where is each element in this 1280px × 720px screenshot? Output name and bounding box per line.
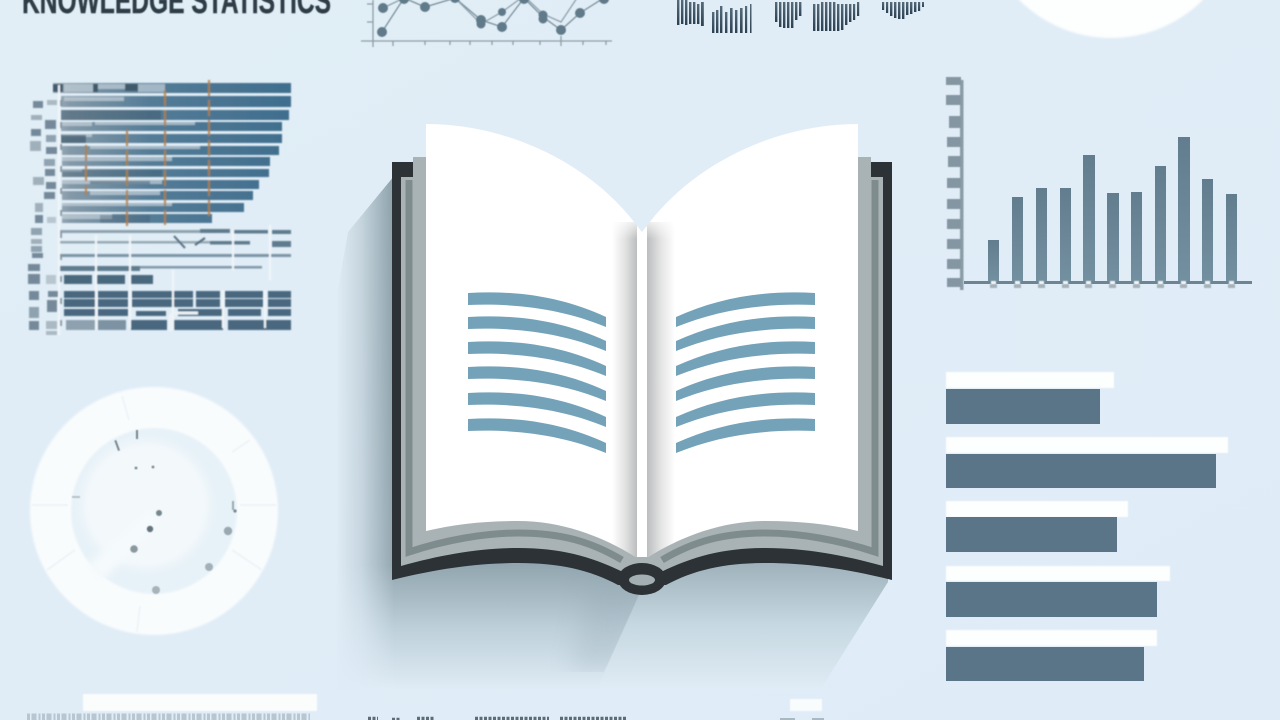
bottom left white label strip bbox=[83, 694, 317, 711]
bottom right white marker bbox=[790, 699, 822, 711]
long shadow of book bbox=[336, 176, 888, 690]
right page text lines bbox=[676, 292, 815, 453]
line chart bbox=[361, 0, 612, 47]
orange gridlines bbox=[86, 80, 209, 232]
right cover and page block bbox=[642, 157, 892, 585]
inner pale disk bbox=[82, 441, 210, 569]
left part of shadow bbox=[336, 176, 650, 690]
open book bbox=[392, 120, 892, 595]
lighter tints and patches on rows bbox=[62, 84, 200, 219]
bottom left faint caption marks bbox=[27, 714, 310, 720]
y axis with ticks bbox=[946, 77, 964, 290]
bars bbox=[988, 137, 1237, 282]
left page text lines bbox=[468, 292, 606, 453]
darker band beside the diagonal bbox=[576, 603, 631, 672]
radial donut chart bbox=[30, 387, 278, 635]
spine loop bbox=[618, 563, 666, 595]
lower segmented rows bbox=[64, 291, 291, 330]
upper bar rows bbox=[53, 83, 291, 223]
x axis ticks bbox=[990, 281, 1235, 288]
vertical bar chart bbox=[946, 77, 1252, 290]
lower thin rows bbox=[60, 229, 291, 284]
white strips bbox=[946, 372, 1228, 646]
bottom centre dark caption marks bbox=[368, 718, 626, 720]
row label blocks bbox=[28, 100, 58, 335]
right page bbox=[639, 120, 864, 562]
dark patches on rows bbox=[53, 84, 162, 223]
partial white donut top right bbox=[981, 0, 1241, 38]
left page bbox=[420, 120, 645, 562]
pale wedge to lower left bbox=[86, 510, 160, 582]
spine hole bbox=[629, 574, 655, 586]
horizontal bars with white label strips bbox=[946, 372, 1228, 681]
right part of shadow bbox=[560, 520, 888, 690]
x axis bbox=[964, 281, 1252, 284]
white vertical gridlines bbox=[59, 85, 270, 335]
ring segment separators bbox=[32, 396, 276, 632]
top bar cluster bbox=[677, 0, 924, 33]
data dots bbox=[72, 430, 237, 594]
bottom right faint marks bbox=[780, 718, 824, 720]
stacked horizontal bar chart bbox=[28, 80, 291, 335]
left cover and page block bbox=[392, 157, 642, 585]
dark bars bbox=[946, 389, 1216, 681]
